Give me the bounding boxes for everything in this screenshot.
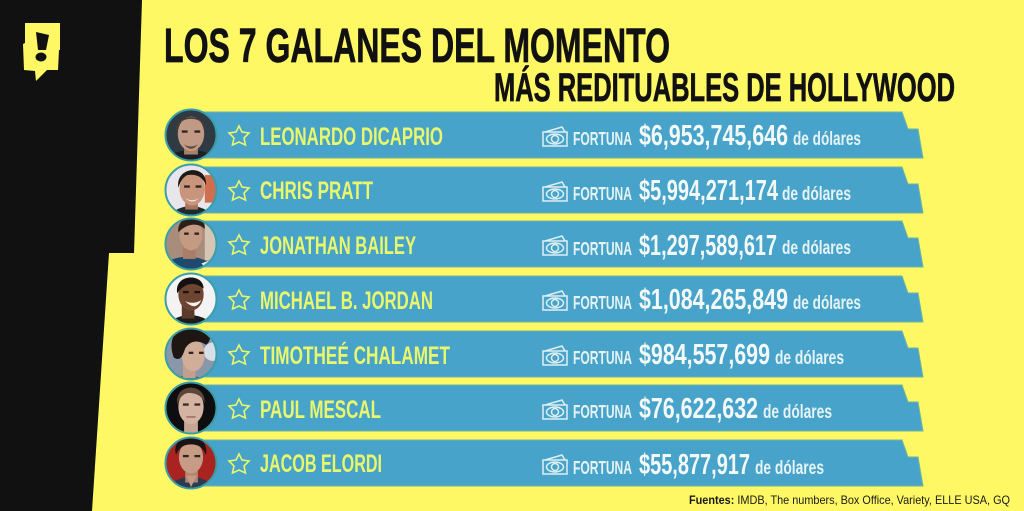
photo: Jonathan Bailey bbox=[166, 220, 216, 268]
icon: star bbox=[229, 454, 249, 473]
row: Michael B. Jordan bbox=[164, 272, 924, 326]
row: Paul Mescal bbox=[164, 382, 924, 434]
currency: de dólares bbox=[782, 238, 851, 259]
currency: de dólares bbox=[793, 129, 861, 150]
icon: money bbox=[543, 127, 567, 146]
name: LEONARDO DICAPRIO bbox=[260, 123, 443, 151]
name: CHRIS PRATT bbox=[260, 177, 373, 205]
black side panel bbox=[0, 0, 142, 511]
icon: money bbox=[543, 182, 567, 201]
name: MICHAEL B. JORDAN bbox=[260, 287, 433, 315]
icon: money bbox=[543, 236, 567, 255]
icon: star bbox=[229, 290, 249, 309]
amount: $5,994,271,174 bbox=[639, 175, 778, 207]
currency: de dólares bbox=[755, 458, 824, 479]
amount: $76,622,632 bbox=[639, 393, 758, 425]
photo: Timothée Chalamet bbox=[166, 330, 216, 378]
logo: speech bubble with exclamation mark bbox=[23, 23, 60, 81]
currency: de dólares bbox=[775, 348, 844, 369]
currency: de dólares bbox=[763, 402, 832, 423]
name: PAUL MESCAL bbox=[260, 396, 381, 424]
currency: de dólares bbox=[793, 293, 861, 314]
row: Timothée Chalamet bbox=[164, 328, 924, 380]
amount: $984,557,699 bbox=[639, 339, 770, 371]
name: JACOB ELORDI bbox=[260, 450, 382, 478]
title: LOS 7 GALANES DEL MOMENTO bbox=[164, 20, 670, 73]
icon: star bbox=[229, 345, 249, 364]
amount: $6,953,745,646 bbox=[639, 120, 788, 152]
icon: star bbox=[229, 399, 249, 418]
fortune label: FORTUNA bbox=[573, 402, 632, 422]
icon: money bbox=[543, 455, 567, 474]
photo: Chris Pratt bbox=[166, 166, 216, 214]
currency: de dólares bbox=[782, 184, 851, 205]
row: Jonathan Bailey bbox=[164, 218, 924, 270]
icon: money bbox=[543, 400, 567, 419]
fortune label: FORTUNA bbox=[573, 293, 632, 313]
amount: $55,877,917 bbox=[639, 449, 750, 481]
photo: Paul Mescal bbox=[166, 384, 216, 432]
title bbox=[164, 20, 955, 110]
fortune label: FORTUNA bbox=[573, 184, 632, 204]
fortune label: FORTUNA bbox=[573, 348, 632, 368]
photo: Michael B. Jordan bbox=[166, 274, 216, 324]
row: Leonardo DiCaprio bbox=[164, 108, 924, 162]
fortune label: FORTUNA bbox=[573, 129, 632, 149]
fortune label: FORTUNA bbox=[573, 239, 632, 259]
row: Jacob Elordi bbox=[164, 436, 924, 490]
fortune label: FORTUNA bbox=[573, 458, 632, 478]
amount: $1,297,589,617 bbox=[639, 230, 777, 262]
name: TIMOTHEÉ CHALAMET bbox=[260, 341, 450, 370]
amount: $1,084,265,849 bbox=[639, 284, 788, 316]
icon: money bbox=[543, 346, 567, 365]
photo: Jacob Elordi bbox=[166, 438, 216, 488]
icon: money bbox=[543, 291, 567, 310]
name: JONATHAN BAILEY bbox=[260, 232, 416, 260]
icon: star bbox=[229, 126, 249, 145]
photo: Leonardo DiCaprio bbox=[166, 110, 216, 160]
icon: star bbox=[229, 235, 249, 254]
icon: star bbox=[229, 181, 249, 200]
row: Chris Pratt bbox=[164, 164, 924, 216]
